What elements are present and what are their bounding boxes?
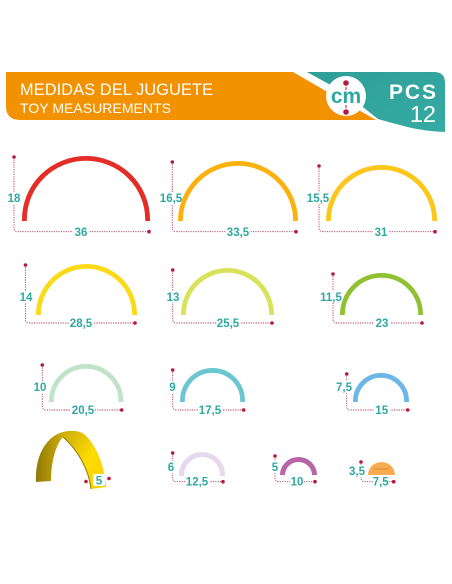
arch 23 x 11,5 (320, 272, 424, 330)
arch 31 x 15,5 (307, 164, 437, 239)
arch 33,5 x 16,5: 16,5 (160, 193, 183, 205)
arch 33,5 x 16,5 (160, 160, 298, 239)
arch 10 x 5: 10 (291, 477, 303, 489)
arch 25,5 x 13 (167, 268, 274, 330)
arch 31 x 15,5: 15,5 (307, 193, 330, 205)
arch 10 x 5: 5 (272, 462, 279, 474)
title: MEDIDAS DEL JUGUETE (20, 81, 213, 99)
cm badge (326, 76, 366, 116)
arch 28,5 x 14: 28,5 (70, 318, 93, 330)
arch 25,5 x 13: 13 (167, 292, 179, 304)
arch 20,5 x 10: 10 (34, 382, 46, 394)
arch 36 x 18: 36 (75, 227, 87, 239)
arch 17,5 x 9: 17,5 (199, 405, 222, 417)
arch 25,5 x 13: 25,5 (217, 318, 240, 330)
arch 15 x 7,5: 7,5 (336, 382, 353, 394)
3D yellow arch, width 5: 5 (96, 476, 103, 488)
arch 31 x 15,5: 31 (375, 227, 388, 239)
arch 23 x 11,5: 11,5 (320, 292, 342, 304)
arch 20,5 x 10: 20,5 (72, 405, 95, 417)
arch 36 x 18: 18 (8, 193, 21, 205)
cm badge: cm (331, 85, 361, 108)
semicircle 7,5 x 3,5 (349, 460, 396, 489)
arch 28,5 x 14: 14 (20, 292, 33, 304)
arch 15 x 7,5: 15 (375, 405, 389, 417)
orange title bar (6, 72, 376, 120)
semicircle 7,5 x 3,5: 7,5 (373, 477, 389, 489)
arch 33,5 x 16,5: 33,5 (227, 227, 250, 239)
arch 23 x 11,5: 23 (376, 318, 388, 330)
pieces count: PCS (389, 81, 436, 104)
arch 12,5 x 6 (166, 451, 225, 489)
arch 10 x 5 (270, 454, 317, 489)
arch 20,5 x 10 (33, 363, 123, 417)
arch 17,5 x 9 (167, 368, 246, 417)
number of pieces: 12 (410, 101, 436, 127)
3D yellow arch, width 5 (36, 431, 111, 489)
arch 12,5 x 6: 12,5 (186, 477, 209, 489)
arch 36 x 18 (7, 155, 151, 239)
subtitle: TOY MEASUREMENTS (20, 100, 171, 116)
arch 28,5 x 14 (19, 263, 137, 330)
header banner (6, 72, 445, 132)
arch 12,5 x 6: 6 (168, 462, 174, 474)
teal corner panel (307, 72, 445, 132)
arch 17,5 x 9: 9 (169, 382, 176, 394)
arch 15 x 7,5 (336, 372, 410, 417)
semicircle 7,5 x 3,5: 3,5 (349, 466, 366, 478)
